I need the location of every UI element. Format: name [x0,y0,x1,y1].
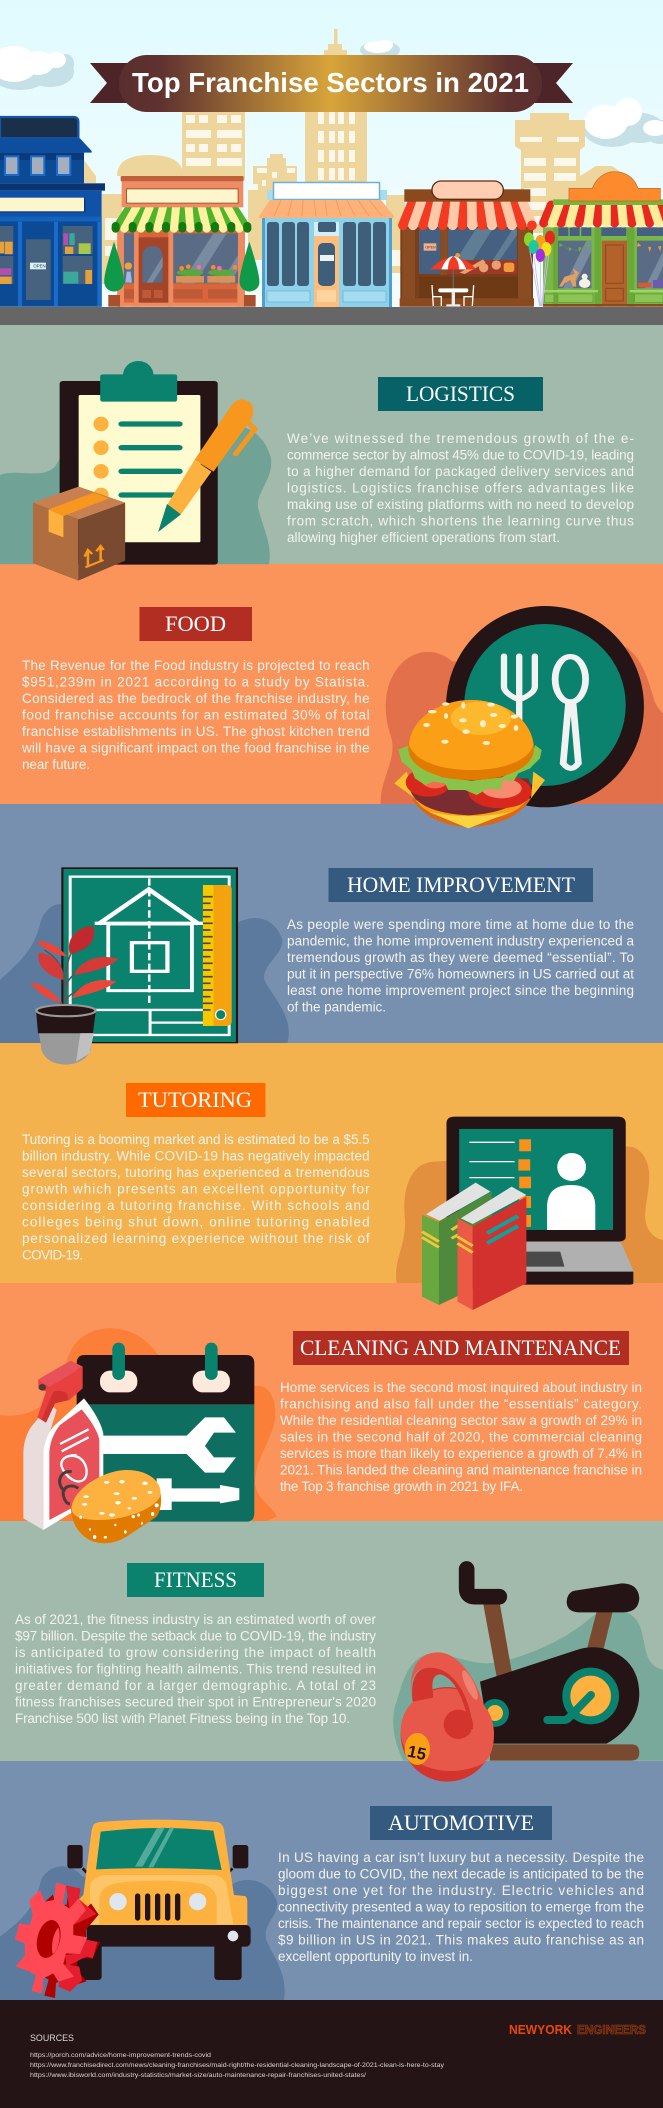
icon: calendar with tools, spray and sponge [0,1328,277,1543]
text: cleaning: services is more than likely to experience a growth of 7.4% in [280,1446,642,1461]
text: tutoring: Tutoring is a booming market and is estimated to be a $5.5 [22,1132,370,1147]
text: fitness: $97 billion. Despite the setback due to COVID-19, the industry [15,1628,376,1644]
icon: kettlebell [401,1652,494,1782]
text: home improvement: put it in perspective 76% homeowners in US carried out at [287,966,634,982]
icon: ruler [203,885,232,1026]
icon: pen [158,399,255,532]
text: cleaning: Home services is the second most inquired about industry in [280,1380,642,1395]
text: automotive: In US having a car isn’t luxury but a necessity. Despite the [278,1850,644,1865]
icon: parcel box [33,487,125,581]
title banner: Top Franchise Sectors in 2021 [132,67,529,98]
text: logistics: making use of existing platforms with no need to develop [287,497,634,512]
text: tutoring: billion industry. While COVID-19 has negatively impacted [22,1148,370,1164]
text: cleaning [280,1380,642,1494]
building windows [105,112,579,266]
icon: spray bottle [23,1361,103,1530]
heading: tutoring: TUTORING [138,1087,252,1112]
text: home improvement: tremendous growth as they were deemed “essential”. To [287,950,634,965]
text: home improvement [287,917,634,1014]
text: tutoring [22,1132,370,1262]
panel: logistics [0,325,663,581]
icon: exercise bike and kettlebell [393,1569,663,1782]
icon: books [422,1183,526,1310]
balloons [524,231,555,306]
text: logistics: from scratch, which shortens the learning curve thus [287,514,634,528]
text: food: $951,239m in 2021 according to a study by Statista. [22,674,370,690]
text: cleaning: 2021. This landed the cleaning and maintenance franchise in [280,1462,642,1478]
panel: tutoring [0,1043,663,1310]
icon: burger [394,700,545,828]
clouds [0,40,663,147]
text: automotive: $9 billion in US in 2021. This makes auto franchise as an [278,1932,644,1948]
text: fitness: fitness franchises secured their spot in Entrepreneur's 2020 [15,1694,376,1710]
text: logistics [287,431,634,545]
heading: food [140,607,252,641]
text: food [21,658,370,772]
icon: potted plant [30,926,118,1065]
trees [104,242,259,307]
toys [559,243,663,288]
text: automotive: crisis. The maintenance and repair sector is expected to reach [278,1916,644,1931]
heading: logistics: LOGISTICS [406,381,515,406]
panel: automotive [0,1761,663,2000]
text: automotive: connectivity presented a way to reposition to emerge from the [278,1900,644,1914]
icon: jeep and gear [15,1820,251,1998]
sources list [30,2033,445,2079]
icon: blueprint and plant [0,867,289,1065]
heading: home improvement [328,868,593,902]
heading: logistics [378,377,543,411]
text: logistics: logistics. Logistics franchise offers advantages like [287,480,634,496]
text: home improvement: least one home improvement project since the beginning [287,983,634,998]
heading: cleaning and maintenance: CLEANING AND MAINTENANCE [300,1335,621,1360]
panel: footer [0,2000,663,2108]
icon: fork [504,656,535,743]
logo: NewYork Engineers: ENGINEERS [577,2023,646,2037]
text: home improvement: As people were spending more time at home due to the [287,917,634,932]
heading: automotive [370,1806,552,1840]
shop: toy store [524,172,663,307]
icon: spoon [555,657,586,768]
text: automotive: excellent opportunity to invest in. [278,1949,473,1964]
shop: bakery [400,181,534,307]
text: cleaning: the Top 3 franchise growth in 2021 by IFA. [280,1479,523,1494]
shop: blue store: OPEN [33,264,46,269]
text: food: will have a significant impact on the food franchise in the [21,740,370,756]
panel: fitness [0,1521,663,1782]
heading: home improvement: HOME IMPROVEMENT [347,872,576,897]
background buildings [84,29,626,284]
text: home improvement: pandemic, the home improvement industry experienced a [287,934,634,948]
shop: blue store [0,117,105,307]
shop: flower store [104,176,259,307]
text: logistics: commerce sector by almost 45% due to COVID-19, leading [287,448,634,462]
text: fitness: Franchise 500 list with Planet Fitness being in the Top 10. [15,1711,350,1726]
sources list: https://www.ibisworld.com/industry-statistics/market-size/auto-maintenance-repair-franchises-united-states/ [30,2072,366,2079]
icon: clipboard, pen and box [0,361,271,581]
heading: food: FOOD [165,611,226,636]
text: food: The Revenue for the Food industry is projected to reach [22,658,370,673]
heading: tutoring [126,1083,266,1117]
text: automotive [278,1850,644,1964]
text: automotive: gloom due to COVID, the next decade is anticipated to be the [278,1866,644,1882]
text: automotive: biggest one yet for the industry. Electric vehicles and [278,1883,644,1898]
logo: NewYork Engineers [509,2023,646,2037]
text: tutoring: several sectors, tutoring has experienced a tremendous [22,1165,370,1180]
icon: kettlebell: 15 [406,1742,428,1764]
panel: food [0,564,663,828]
awning: red stripes [403,202,532,225]
heading: fitness [127,1563,264,1597]
text: cleaning: sales in the second half of 2020, the commercial cleaning [280,1430,642,1444]
sources list: SOURCES [30,2033,74,2044]
text: cleaning: While the residential cleaning sector saw a growth of 29% in [280,1413,642,1428]
text: logistics: We’ve witnessed the tremendous growth of the e- [287,431,634,446]
text: logistics: to a higher demand for packaged delivery services and [287,464,634,479]
text: fitness: is anticipated to grow considering the impact of health [15,1645,376,1660]
shop: light blue store [259,182,394,307]
heading: fitness: FITNESS [154,1567,237,1592]
icon: plate and cutlery [381,606,663,807]
sources list: https://porch.com/advice/home-improvement-trends-covid [30,2052,212,2059]
logo: NewYork Engineers: NEWYORK [509,2023,572,2037]
icon: laptop and books [396,1117,663,1310]
text: fitness: greater demand for a larger demographic. A total of 23 [15,1678,376,1693]
awning: red and cream stripes [544,205,663,223]
road [0,307,663,325]
text: tutoring: considering a tutoring franchise. With schools and [22,1198,370,1213]
text: food: near future. [22,757,90,772]
heading: automotive: AUTOMOTIVE [388,1810,534,1835]
text: cleaning: franchising and also fall under the “essentials” category. [280,1396,642,1412]
panel: home improvement [0,804,663,1065]
icon: gear [15,1883,100,1998]
text: tutoring: COVID-19. [22,1248,83,1262]
blob behind jeep [0,1866,285,2000]
text: food: food franchise accounts for an estimated 30% of total [22,708,370,722]
text: fitness [15,1612,376,1726]
text: tutoring: growth which presents an excellent opportunity for [22,1182,370,1196]
text: tutoring: personalized learning experience without the risk of [22,1231,370,1246]
title banner [90,55,573,112]
sources list: https://www.franchisedirect.com/news/cleaning-franchises/maid-right/the-residential-cleaning-landscape-of-2021-clean-is-here-to-stay [30,2062,445,2069]
icon: sponge [71,1470,161,1543]
text: tutoring: colleges being shut down, online tutoring enabled [22,1214,370,1230]
text: logistics: allowing higher efficient operations from start. [287,530,560,545]
text: fitness: As of 2021, the fitness industry is an estimated worth of over [15,1612,376,1627]
panel: header illustration [0,0,663,325]
text: home improvement: of the pandemic. [287,1000,386,1014]
panel: cleaning and maintenance [0,1283,663,1543]
text: food: Considered as the bedrock of the franchise industry, he [22,691,370,706]
umbrella table [430,253,476,306]
text: food: franchise establishments in US. The ghost kitchen trend [22,724,370,739]
shop: bakery: OPEN [425,245,436,249]
text: fitness: initiatives for fighting health ailments. This trend resulted in [15,1662,376,1676]
awning: green stripes [116,207,247,229]
